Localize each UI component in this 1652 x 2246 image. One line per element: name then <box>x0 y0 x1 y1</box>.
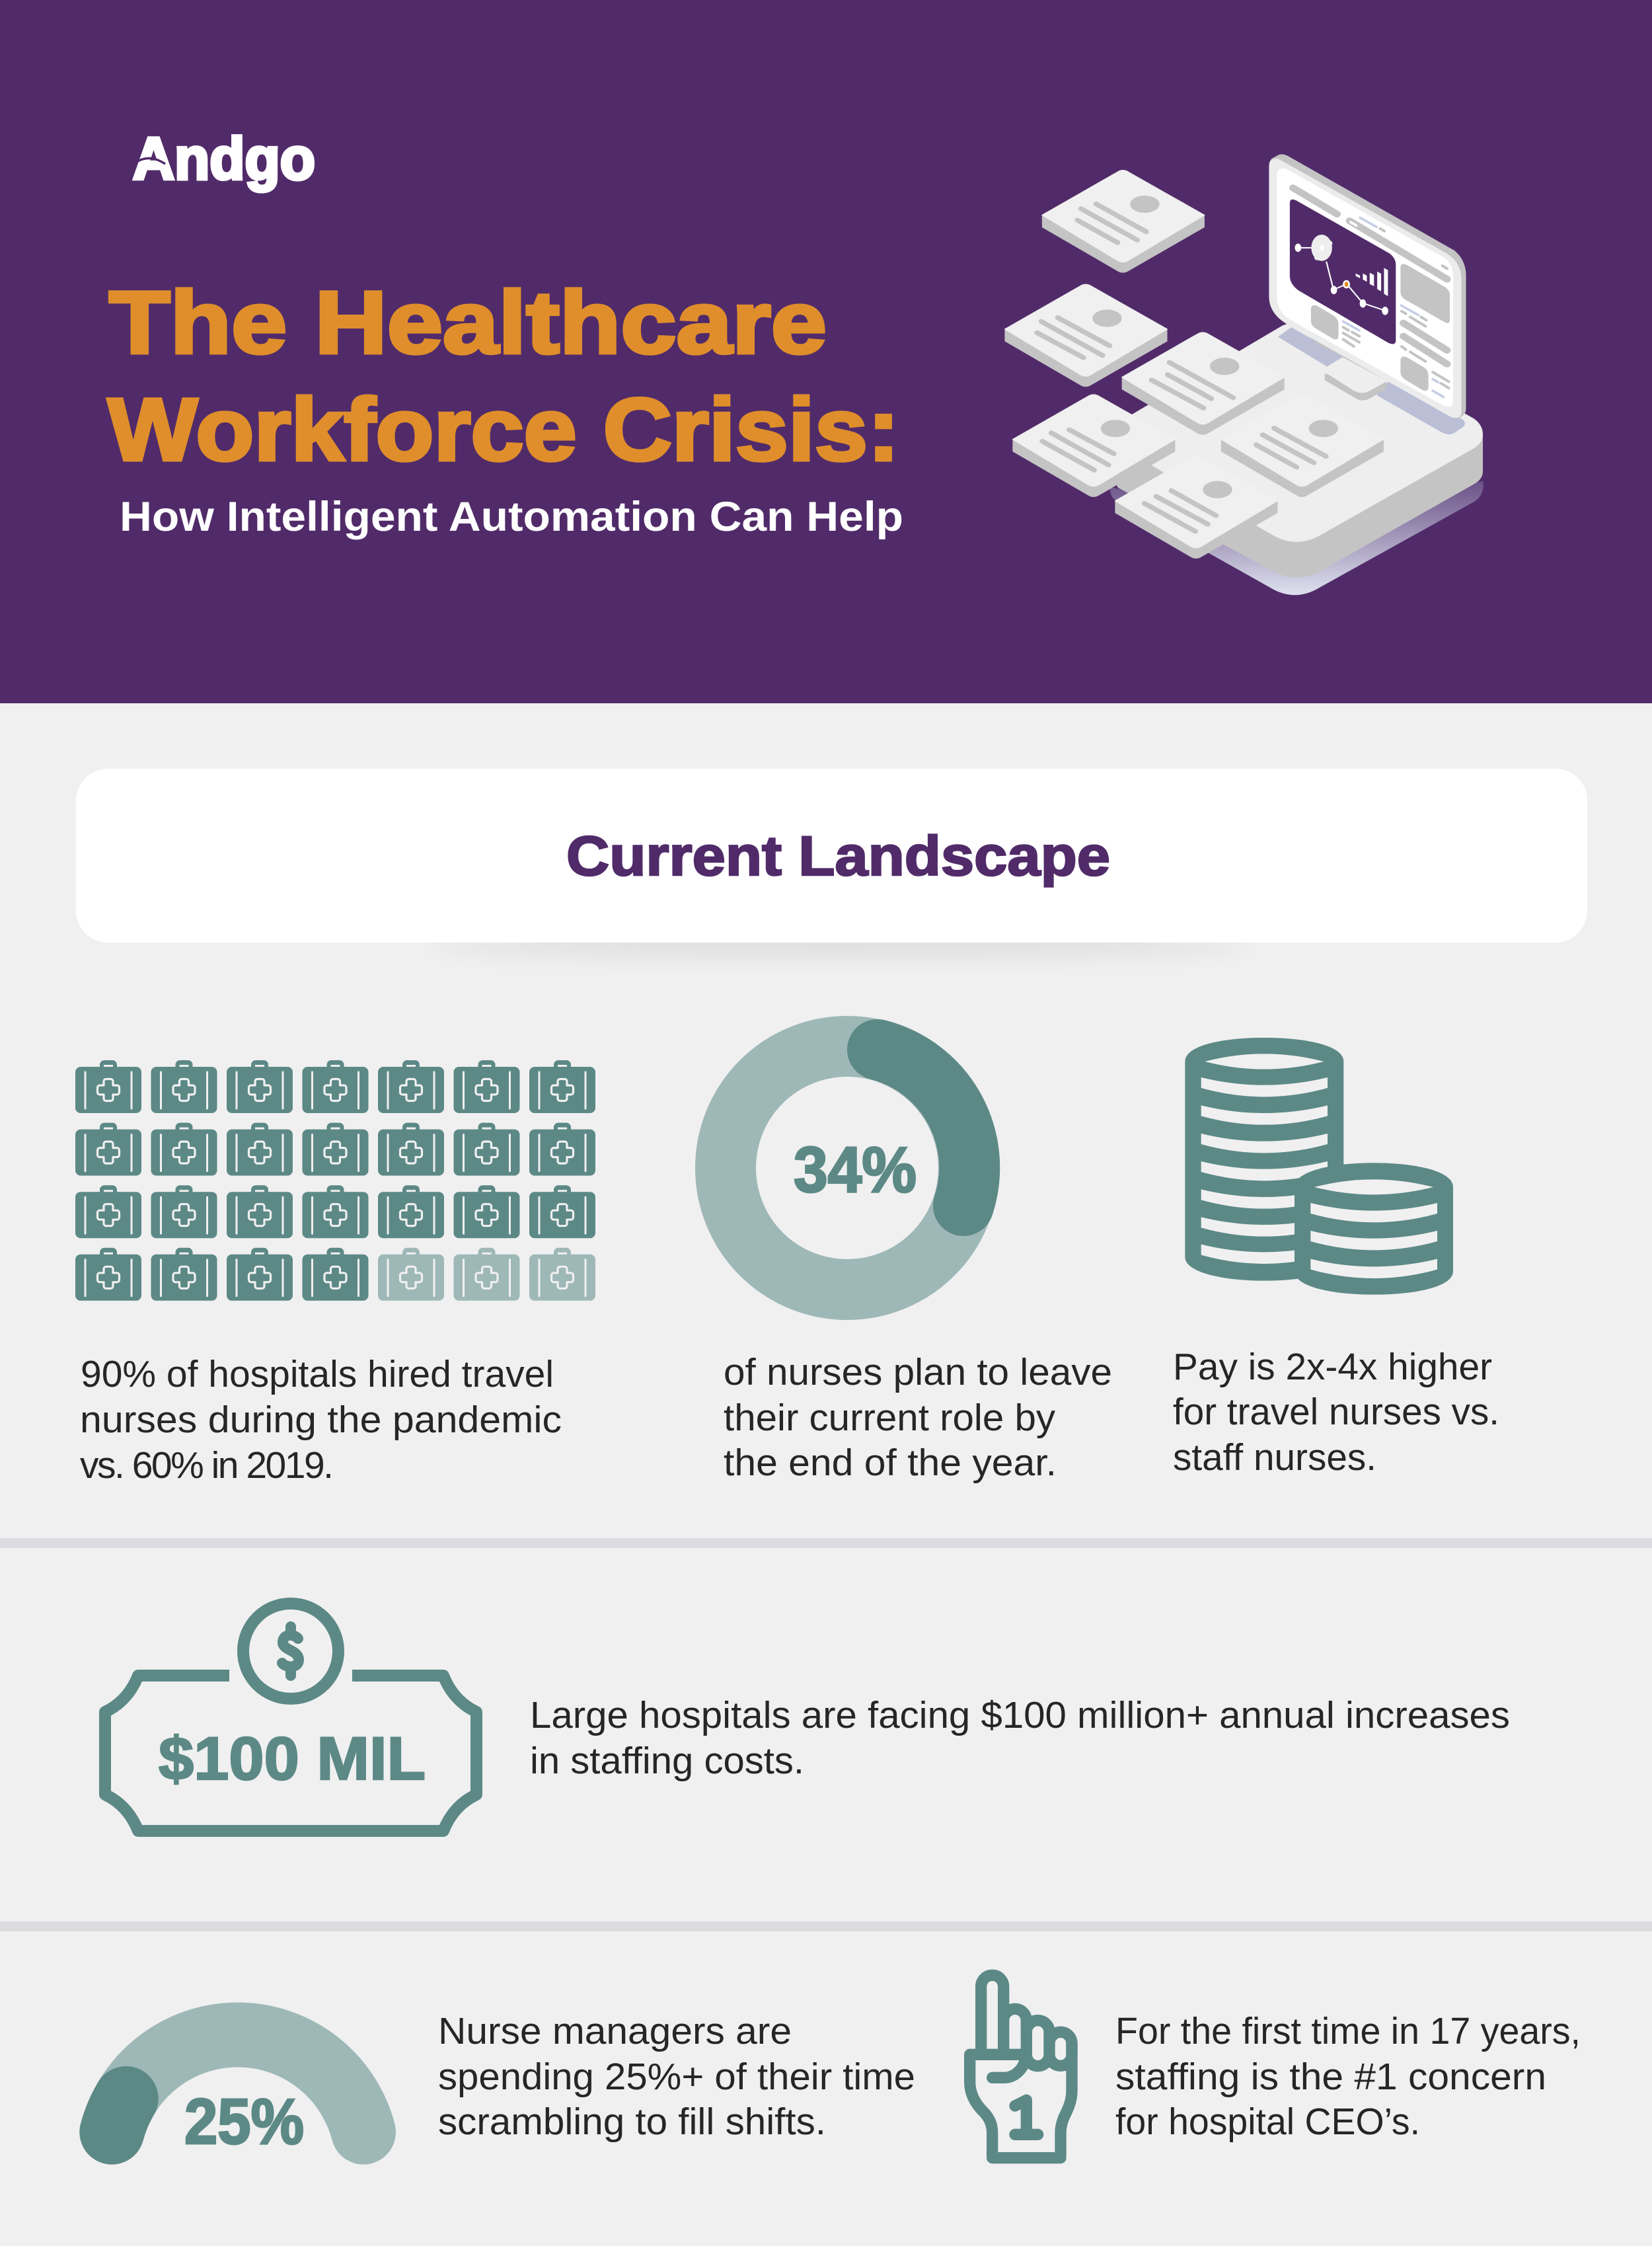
document cards <box>1004 171 1384 559</box>
illustration: isometric monitor and document cards <box>1004 154 1483 595</box>
text: nurses leaving stat: the end of the year. <box>724 1442 1057 1484</box>
chart: medical kit pictogram grid <box>75 1060 595 1301</box>
title: Workforce Crisis: <box>108 381 899 479</box>
text: travel nurses stat: vs. 60% in 2019. <box>80 1444 334 1487</box>
banner shadow <box>430 933 1249 954</box>
logo: Andgo: Andgo <box>133 126 315 192</box>
text: staffing costs <box>530 1694 1510 1782</box>
text: travel nurses stat: 90% of hospitals hired travel <box>81 1353 554 1395</box>
header band <box>0 0 1652 703</box>
text: nurse managers: scrambling to fill shifts. <box>438 2101 826 2143</box>
platform glow <box>1110 481 1483 595</box>
icon: coin stacks <box>1185 1038 1453 1295</box>
text: nurse managers: Nurse managers are <box>438 2010 792 2052</box>
text: nurses leaving stat: their current role by <box>724 1397 1056 1439</box>
icon: $100 MIL banknote <box>105 1604 476 1831</box>
text: nurse managers <box>438 2010 915 2143</box>
panel: current landscape heading <box>76 769 1587 943</box>
donut value: 34% <box>794 1134 917 1206</box>
text: pay stat <box>1173 1346 1499 1479</box>
banknote value: $100 MIL <box>159 1725 426 1793</box>
text: nurses leaving stat: of nurses plan to leave <box>724 1351 1112 1393</box>
text: staffing costs: Large hospitals are facing $100 million+ annual increases <box>530 1694 1510 1736</box>
text: travel nurses stat <box>80 1353 562 1487</box>
text: CEO concern: For the first time in 17 years, <box>1115 2010 1581 2052</box>
platform <box>1098 323 1483 578</box>
text: nurse managers: spending 25%+ of their time <box>438 2056 915 2098</box>
text: pay stat: Pay is 2x-4x higher <box>1173 1346 1492 1388</box>
text: CEO concern: staffing is the #1 concern <box>1115 2056 1546 2098</box>
text: staffing costs: in staffing costs. <box>530 1740 804 1782</box>
text: travel nurses stat: nurses during the pandemic <box>80 1399 562 1441</box>
chart: 25% gauge <box>112 2035 363 2132</box>
monitor <box>1269 154 1466 418</box>
chart: 34% donut <box>726 1046 969 1290</box>
monitor chart <box>1295 235 1388 315</box>
text: pay stat: for travel nurses vs. <box>1173 1391 1499 1433</box>
icon: number one hand <box>970 1975 1072 2158</box>
text: CEO concern: for hospital CEO’s. <box>1115 2101 1420 2143</box>
subtitle: How Intelligent Automation Can Help <box>120 494 903 540</box>
gauge value: 25% <box>184 2085 304 2157</box>
title: The Healthcare <box>109 274 827 372</box>
heading text: Current Landscape <box>566 825 1110 887</box>
text: pay stat: staff nurses. <box>1173 1436 1376 1479</box>
text: nurses leaving stat <box>724 1351 1112 1484</box>
text: CEO concern <box>1115 2010 1581 2143</box>
title <box>108 274 899 479</box>
